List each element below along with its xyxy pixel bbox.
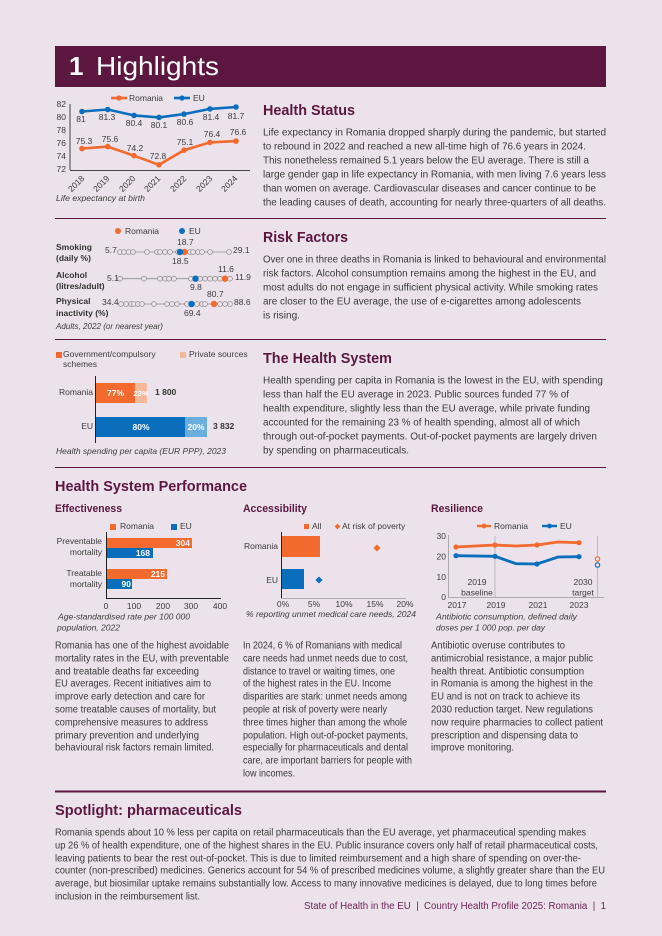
dot strip chart: risk factors: Physical <box>56 296 90 306</box>
line chart: life expectancy at birth: Life expectancy at birth <box>56 193 145 203</box>
panel: effectiveness: 215 <box>151 569 165 579</box>
panel: effectiveness: 100 <box>127 601 141 611</box>
dot strip chart: risk factors: Alcohol <box>56 270 87 280</box>
footer: State of Health in the EU | Country Health Profile 2025: Romania | 1 <box>304 901 606 912</box>
text block: effectiveness: some treatable causes of mortality, but <box>55 704 216 716</box>
line chart: life expectancy at birth: 2024 <box>219 173 240 194</box>
panel: resilience: 20 <box>437 552 446 562</box>
stacked bar chart: health spending per capita: EU <box>81 421 93 431</box>
panel: effectiveness: 300 <box>184 601 198 611</box>
line chart: life expectancy at birth: 74.2 <box>127 143 144 153</box>
text block: effectiveness: EU averages. Recent initiatives aim to <box>55 678 211 690</box>
text block: health status: than women on average. Cardiovascular diseases and cancer continue to be <box>263 184 596 194</box>
dot strip chart: risk factors: 9.8 <box>190 282 202 292</box>
text block: risk factors: Over one in three deaths in Romania is linked to behavioural and environmental <box>263 254 606 266</box>
panel: effectiveness: 168 <box>136 548 150 558</box>
panel: accessibility: Accessibility <box>243 503 308 515</box>
dot strip chart: risk factors: (daily %) <box>56 253 91 263</box>
text block: the health system: The Health System <box>263 350 392 367</box>
text block: the health system: by spending on pharmaceuticals. <box>263 446 409 456</box>
line chart: life expectancy at birth: 76.6 <box>230 127 247 137</box>
line chart: life expectancy at birth: 2019 <box>91 173 112 194</box>
panel: effectiveness: 304 <box>176 538 190 548</box>
panel: resilience: baseline <box>461 588 493 598</box>
text block: accessibility: of the highest rates in the EU. Income <box>243 678 391 690</box>
text block: effectiveness: behavioural risk factors remain limited. <box>55 742 214 754</box>
panel: spotlight pharmaceuticals <box>55 802 605 902</box>
stacked bar chart: health spending per capita: 80% <box>132 422 150 432</box>
stacked bar chart: health spending per capita: schemes <box>63 359 97 369</box>
line chart: life expectancy at birth: 81.7 <box>228 111 245 121</box>
line chart: life expectancy at birth: 76 <box>57 138 66 148</box>
dot strip chart: risk factors: Adults, 2022 (or nearest year) <box>55 321 163 331</box>
text block: effectiveness: and treatable deaths far exceeding <box>55 666 199 678</box>
panel: spotlight pharmaceuticals: up 26 % of health expenditure, one of the highest shares in the EU. Public insurance covers only half of retail pharmaceutical costs, <box>55 840 598 852</box>
dot strip chart: risk factors <box>55 226 251 331</box>
stacked bar chart: health spending per capita: Private sources <box>189 349 248 359</box>
dot strip chart: risk factors: 11.6 <box>218 264 234 274</box>
panel: resilience: 2023 <box>570 600 589 610</box>
panel: effectiveness: Treatable <box>66 568 102 578</box>
line chart: life expectancy at birth: 80.6 <box>177 117 194 127</box>
panel: effectiveness: 400 <box>213 601 227 611</box>
text block: effectiveness: mortality rates in the EU, with preventable <box>55 654 229 664</box>
stacked bar chart: health spending per capita: 3 832 <box>213 421 235 431</box>
text block: accessibility: In 2024, 6 % of Romanians with medical <box>243 640 402 652</box>
dot strip chart: risk factors: 5.1 <box>107 273 119 283</box>
text block: accessibility: population. High out-of-pocket payments, <box>243 730 408 742</box>
text block: effectiveness: Romania has one of the highest avoidable <box>55 640 229 652</box>
panel: resilience: Antibiotic consumption, defined daily <box>435 612 578 622</box>
dot strip chart: risk factors: 69.4 <box>184 308 201 318</box>
dot strip chart: risk factors: 18.7 <box>177 237 194 247</box>
panel: effectiveness: Romania <box>120 521 154 531</box>
text block: the health system: accounted for the remaining 23 % of health spending, almost all of which <box>263 418 580 428</box>
text block: resilience: 2030 reduction target. New regulations <box>431 704 593 716</box>
text block: risk factors: most adults do not engage in sufficient physical activity. While smoking rates <box>263 282 598 294</box>
line chart: life expectancy at birth: 75.6 <box>102 134 119 144</box>
line chart: life expectancy at birth: 78 <box>57 125 66 135</box>
panel: resilience: Romania <box>494 521 528 531</box>
text block: health status: large gender gap in life expectancy in Romania, with men living 7.6 years less <box>263 170 606 180</box>
dot strip chart: risk factors: 18.5 <box>172 256 189 266</box>
panel: accessibility <box>243 503 416 619</box>
panel: effectiveness: mortality <box>70 579 103 589</box>
panel: effectiveness: population, 2022 <box>56 622 120 632</box>
panel: effectiveness: mortality <box>70 547 103 557</box>
stacked bar chart: health spending per capita: 23% <box>133 389 149 398</box>
text block: the health system: Health spending per capita in Romania is the lowest in the EU, with spending <box>263 376 603 386</box>
text block: risk factors <box>263 229 606 322</box>
panel: accessibility: % reporting unmet medical care needs, 2024 <box>246 609 416 619</box>
line chart: life expectancy at birth: 2022 <box>168 173 189 194</box>
text block: accessibility: people at risk of poverty were nearly <box>243 704 387 716</box>
panel: accessibility: 15% <box>366 599 384 609</box>
line chart: life expectancy at birth: 81.3 <box>99 112 116 122</box>
panel: spotlight pharmaceuticals: inclusion in the reimbursement list. <box>55 892 200 902</box>
panel: resilience <box>431 503 604 632</box>
panel: effectiveness <box>55 503 227 632</box>
panel: effectiveness: 200 <box>156 601 170 611</box>
panel: resilience: 2021 <box>529 600 548 610</box>
stacked bar chart: health spending per capita: Health spending per capita (EUR PPP), 2023 <box>56 446 226 456</box>
line chart: life expectancy at birth: 74 <box>57 151 66 161</box>
panel: resilience: doses per 1 000 pop. per day <box>436 622 546 632</box>
text block: resilience: health threat. Antibiotic consumption <box>431 666 584 678</box>
stacked bar chart: health spending per capita: 77% <box>107 388 124 398</box>
stacked bar chart: health spending per capita: Romania <box>59 387 93 397</box>
panel: effectiveness: Age-standardised rate per 100 000 <box>57 612 190 622</box>
text block: accessibility: care needs had unmet needs due to cost, <box>243 654 408 664</box>
line chart: life expectancy at birth: 81 <box>76 114 86 124</box>
dot strip chart: risk factors: 34.4 <box>102 297 119 307</box>
line chart: life expectancy at birth: Romania <box>129 93 163 103</box>
line chart: life expectancy at birth: 82 <box>57 99 66 109</box>
line chart: life expectancy at birth: 80.4 <box>126 118 143 128</box>
stacked bar chart: health spending per capita <box>56 349 248 456</box>
text block: accessibility: disparities are stark: unmet needs among <box>243 692 407 702</box>
line chart: life expectancy at birth: 80.1 <box>151 120 168 130</box>
panel: accessibility: 5% <box>308 599 321 609</box>
line chart: life expectancy at birth: 2018 <box>66 173 87 194</box>
panel: spotlight pharmaceuticals: Romania spends about 10 % less per capita on retail pharmaceuticals than the EU average, yet pharmaceutical spending makes <box>55 828 586 838</box>
text block: the health system: through out-of-pocket payments. Out-of-pocket payments are largely driven <box>263 432 597 442</box>
panel: accessibility: 20% <box>396 599 414 609</box>
line chart: life expectancy at birth: 2023 <box>194 173 215 194</box>
header banner <box>55 46 606 87</box>
text block: health status: the leading causes of death, accounting for nearly three-quarters of all deaths. <box>263 198 606 208</box>
dot strip chart: risk factors: 5.7 <box>105 245 117 255</box>
line chart: life expectancy at birth: 76.4 <box>204 129 221 139</box>
line chart: life expectancy at birth: 72.8 <box>150 151 167 161</box>
text block: effectiveness: comprehensive measures to address <box>55 718 208 728</box>
dot strip chart: risk factors: inactivity (%) <box>56 308 109 318</box>
line chart: life expectancy at birth: EU <box>193 93 205 103</box>
panel: accessibility: At risk of poverty <box>342 521 406 531</box>
text block: effectiveness <box>55 640 229 754</box>
panel: resilience: 2019 <box>487 600 506 610</box>
panel: accessibility: 0% <box>277 599 290 609</box>
dot strip chart: risk factors: 29.1 <box>233 245 250 255</box>
text block: resilience: antimicrobial resistance, a major public <box>431 654 593 664</box>
header banner: Highlights <box>96 51 219 81</box>
text block: the health system: health expenditure, slightly less than the EU average, while private funding <box>263 404 590 414</box>
stacked bar chart: health spending per capita: 20% <box>187 422 205 432</box>
panel: accessibility: 10% <box>335 599 353 609</box>
text block: resilience: prescription and dispensing data to <box>431 730 578 742</box>
panel: spotlight pharmaceuticals: counter (non-prescribed) medicines. Generics account for 54 % of prescribed medicines volume, a slightly greater share than the EU <box>55 866 605 876</box>
panel: effectiveness: Preventable <box>57 536 102 546</box>
panel: resilience: 30 <box>437 531 446 541</box>
text block: health status: This nonetheless remained 5.1 years below the EU average. There is still a <box>263 156 589 166</box>
panel: resilience: 2017 <box>448 600 467 610</box>
panel: resilience: 0 <box>441 592 446 602</box>
text block: accessibility: distance to travel or waiting times, one <box>243 666 395 678</box>
panel: resilience: 2030 <box>574 577 593 587</box>
text block: risk factors: Risk Factors <box>263 229 348 246</box>
text block: risk factors: risk factors. Alcohol consumption remains among the highest in the EU, and <box>263 268 596 280</box>
text block: risk factors: is rising. <box>263 310 300 322</box>
panel: accessibility: Romania <box>244 541 278 551</box>
text block: accessibility <box>243 640 412 780</box>
line chart: life expectancy at birth: 72 <box>57 164 66 174</box>
text block: resilience: Antibiotic overuse contributes to <box>431 640 565 652</box>
text block: health status <box>263 102 606 208</box>
stacked bar chart: health spending per capita: 1 800 <box>155 387 177 397</box>
dot strip chart: risk factors: Romania <box>125 226 159 236</box>
text block: accessibility: three times higher than among the whole <box>243 718 407 728</box>
line chart: life expectancy at birth: 81.4 <box>203 112 220 122</box>
text block: effectiveness: improve early detection and care for <box>55 692 206 702</box>
text block: accessibility: low incomes. <box>243 768 295 780</box>
dot strip chart: risk factors: Smoking <box>56 242 92 252</box>
text block: health status: to rebound in 2022 and reached a new all-time high of 76.6 years in 2024. <box>263 142 586 152</box>
text block: health status: Life expectancy in Romania dropped sharply during the pandemic, but started <box>263 128 606 138</box>
panel: resilience: Resilience <box>431 503 483 515</box>
line chart: life expectancy at birth: 75.1 <box>177 137 194 147</box>
panel: resilience: EU <box>560 521 572 531</box>
line chart: life expectancy at birth: 2020 <box>117 173 138 194</box>
line chart: life expectancy at birth <box>56 93 250 203</box>
panel: spotlight pharmaceuticals: leaving patients to bear the rest out-of-pocket. This is due to limited reimbursement and a high share of spending on over-the- <box>55 854 581 864</box>
text block: resilience: now require pharmacies to collect patient <box>431 718 603 728</box>
panel: accessibility: All <box>312 521 322 531</box>
text block: the health system: less than half the EU average in 2023. Public sources funded 77 % of <box>263 390 569 400</box>
text block: health status: Health Status <box>263 102 355 119</box>
dot strip chart: risk factors: 80.7 <box>207 289 224 299</box>
text block: effectiveness: primary prevention and underlying <box>55 730 199 742</box>
stacked bar chart: health spending per capita: Government/compulsory <box>63 349 156 359</box>
text block: resilience <box>431 640 603 754</box>
line chart: life expectancy at birth: 75.3 <box>76 136 93 146</box>
dot strip chart: risk factors: EU <box>189 226 201 236</box>
text block: the health system <box>263 350 603 456</box>
text block: resilience: EU and is not on track to achieve its <box>431 692 580 702</box>
dot strip chart: risk factors: (litres/adult) <box>56 281 105 291</box>
panel: effectiveness: Effectiveness <box>55 503 122 515</box>
panel: spotlight pharmaceuticals: Spotlight: pharmaceuticals <box>55 802 242 819</box>
header banner: 1 <box>69 51 83 81</box>
panel: spotlight pharmaceuticals: average, but biosimilar uptake remains substantially low. Access to many innovative medicines is delayed, due to long times before <box>55 878 597 890</box>
panel: resilience: 10 <box>437 572 446 582</box>
dot strip chart: risk factors: 88.6 <box>234 297 251 307</box>
panel: resilience: target <box>572 588 594 598</box>
line chart: life expectancy at birth: 80 <box>57 112 66 122</box>
text block: resilience: improve monitoring. <box>431 742 514 754</box>
dot strip chart: risk factors: 11.9 <box>235 272 251 282</box>
text block: accessibility: care, are important barriers for people with <box>243 756 412 766</box>
text block: accessibility: especially for pharmaceuticals and dental <box>243 742 408 754</box>
panel: resilience: 2019 <box>468 577 487 587</box>
text block: resilience: in Romania is among the highest in the <box>431 678 593 690</box>
heading: health system performance: Health System Performance <box>55 478 247 495</box>
panel: effectiveness: 0 <box>104 601 109 611</box>
panel: accessibility: EU <box>266 575 278 585</box>
line chart: life expectancy at birth: 2021 <box>142 173 163 194</box>
panel: effectiveness: 90 <box>122 579 131 589</box>
text block: risk factors: are closer to the EU average, the use of e-cigarettes among adolescents <box>263 296 581 308</box>
panel: effectiveness: EU <box>180 521 192 531</box>
